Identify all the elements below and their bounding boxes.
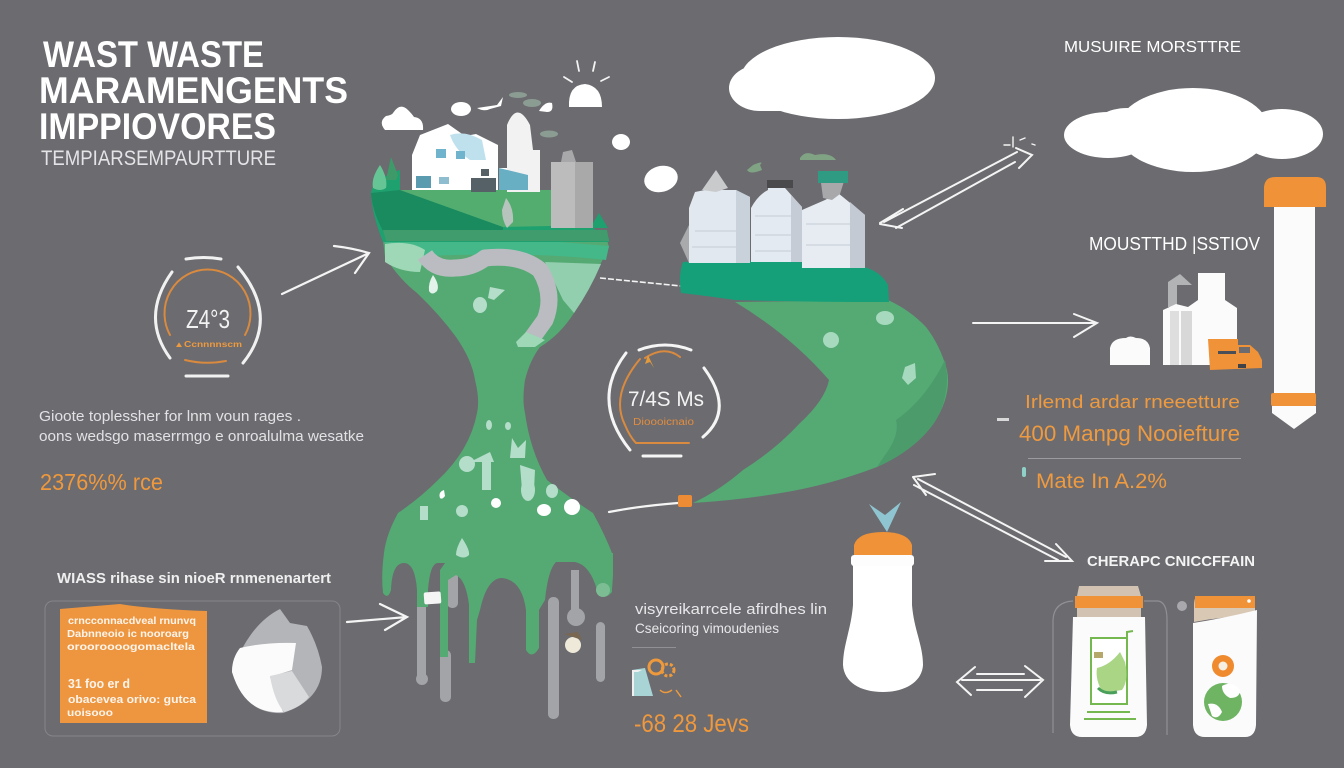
gauge: centre dial: Dioooicnaio [633, 417, 695, 428]
icon: bottle [843, 502, 923, 692]
icon: thermometer tube [1264, 177, 1326, 429]
icon: small recycling mark [632, 660, 681, 697]
heading: right middle: MOUSTTHD |SSTIOV [1089, 234, 1260, 254]
panel: containers [1053, 586, 1257, 737]
gauge: left temperature dial: Z4°3 [186, 304, 230, 334]
drops on funnel [420, 275, 558, 558]
container left [1070, 586, 1147, 737]
stat: left orange figure: 2376%% rce [40, 469, 163, 495]
title block: IMPPIOVORES [39, 106, 276, 147]
panel: bottom left card [45, 601, 340, 736]
arrow: double horizontal [957, 666, 1043, 697]
arrow: gauge to funnel [282, 246, 369, 294]
gauge: left temperature dial [155, 258, 260, 376]
tan node [565, 637, 581, 653]
orange note: 31 foo er d [68, 676, 130, 691]
gauge: centre dial [609, 345, 719, 456]
orange note: uoisooo [67, 708, 113, 719]
droplets [823, 311, 916, 385]
title block: WAST WASTE [43, 34, 264, 75]
text block: left description: Gioote toplessher for lnm voun rages . [39, 409, 301, 425]
heading: containers: CHERAPC CNICCFFAIN [1087, 553, 1255, 570]
truck [1208, 339, 1262, 370]
text block: right orange stats: Mate In A.2% [1036, 470, 1167, 493]
heading: top right: MUSUIRE MORSTTRE [1064, 39, 1241, 56]
island hill [371, 170, 609, 242]
trees [373, 165, 386, 190]
text block: right orange stats [997, 391, 1241, 493]
cloud: right [1064, 88, 1323, 172]
text block: centre lower description: visyreikarrcele afirdhes lin [635, 601, 827, 618]
arrow: double to containers [913, 474, 1072, 561]
connector: orange node to funnel [609, 495, 692, 512]
orange note: Dabnneoio ic nooroarg [67, 629, 189, 640]
arrow: to factory [973, 314, 1097, 337]
arrow: card to funnel [347, 604, 407, 630]
gauge: left temperature dial: ▲Ccnnnnscm [174, 340, 242, 349]
orange note [60, 604, 207, 723]
grey pipes [416, 568, 605, 719]
title block: TEMPIARSEMPAURTTURE [41, 147, 276, 170]
heading: bottom left: WIASS rihase sin nioeR rnmenenartert [57, 571, 331, 587]
swoosh body [693, 300, 948, 503]
text block: right orange stats: 400 Manpg Nooiefture [1019, 421, 1240, 446]
buildings [551, 162, 593, 228]
status dot [1177, 601, 1187, 611]
text block: centre lower description: Cseicoring vimoudenies [635, 620, 779, 636]
orange note: obacevea orivo: gutca [68, 694, 197, 706]
gauge: centre dial: 7/4S Ms [628, 388, 704, 411]
title block [39, 34, 348, 170]
arrow: to upper right cloud [880, 137, 1035, 228]
orange note: crncconnacdveal rnunvq [68, 616, 196, 627]
container right [1193, 596, 1257, 737]
icon: factory and truck [1110, 273, 1262, 370]
title block: MARAMENGENTS [39, 70, 348, 111]
illustration: funnel with left island [371, 112, 613, 719]
orange note: orooroooogomacltela [67, 642, 196, 653]
illustration: clouds and sun above island [382, 61, 681, 196]
funnel body [382, 240, 612, 663]
text block: centre lower description [635, 601, 827, 636]
stat: centre orange figure: -68 28 Jevs [634, 710, 749, 738]
island top [680, 261, 889, 302]
connector: dashed line between islands [600, 278, 681, 286]
text block: left description: oons wedsgo maserrmgo e onroalulma wesatke [39, 429, 364, 445]
buildings [689, 190, 750, 263]
text block: left description [39, 409, 364, 445]
illustration: right island and buildings [680, 153, 948, 503]
icon: water drop [232, 609, 322, 713]
cloud: large top centre [729, 37, 935, 119]
text block: right orange stats: Irlemd ardar rneeetture [1025, 391, 1240, 412]
